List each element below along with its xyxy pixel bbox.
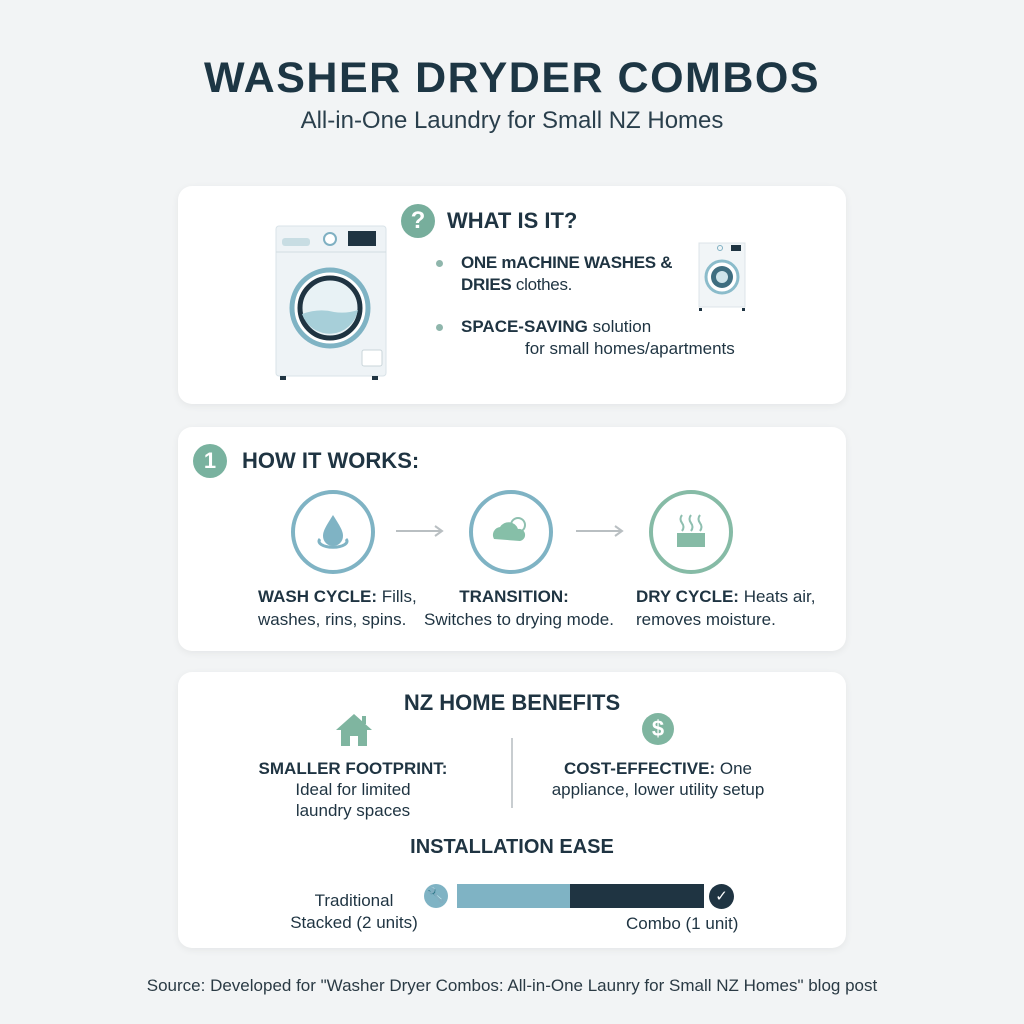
icon: wrench [424,884,448,908]
icon: step number: 1 [204,448,216,473]
bullet 2: for small homes/apartments [525,339,735,358]
title: WASHER DRYDER COMBOS [204,54,820,102]
text: wash cycle: washes, rins, spins. [258,610,406,629]
bullet 2 [436,317,735,358]
icon: dollar [642,713,674,745]
bullet 1: DRIES clothes. [461,275,572,294]
arrow [396,525,444,537]
label: traditional: Traditional [315,891,393,910]
icon: wrench: 🔧 [427,887,445,904]
heading: installation ease: INSTALLATION EASE [410,836,614,858]
benefit: smaller footprint: SMALLER FOOTPRINT: [259,759,447,778]
bullet 1: ONE mACHINE WASHES & [461,253,672,272]
panel: NZ home benefits [178,672,846,948]
panel: what is it [178,186,846,404]
icon: dry [649,490,733,574]
icon: transition [469,490,553,574]
text: wash cycle: WASH CYCLE: Fills, [258,587,417,606]
text: dry cycle [636,587,816,629]
heading: benefits: NZ HOME BENEFITS [404,690,620,715]
divider [511,738,513,808]
benefit: cost-effective [552,759,764,799]
text: transition [424,587,614,629]
benefit: smaller footprint: Ideal for limited [295,780,411,799]
icon: step number [193,444,227,478]
icon: small washer [698,242,746,311]
benefit: cost-effective: COST-EFFECTIVE: One [564,759,752,778]
icon: question badge: ? [411,207,425,234]
bar chart: installation ease [457,884,704,908]
label: traditional [290,891,418,932]
label: combo: Combo (1 unit) [626,914,738,933]
bullet 2: SPACE-SAVING solution [461,317,651,336]
bullet 1 [436,253,672,294]
icon: check [709,884,734,909]
text: dry cycle: DRY CYCLE: Heats air, [636,587,816,606]
heading: how it works: HOW IT WORKS: [242,448,419,473]
benefit: smaller footprint [259,759,447,820]
text: wash cycle [258,587,417,629]
icon: wash [291,490,375,574]
icon: dollar: $ [652,716,664,741]
heading: what is it: WHAT IS IT? [447,208,577,233]
text: dry cycle: removes moisture. [636,610,776,629]
label: traditional: Stacked (2 units) [290,913,418,932]
icon: washing machine [276,226,386,380]
benefit: smaller footprint: laundry spaces [296,801,410,820]
subtitle: All-in-One Laundry for Small NZ Homes [301,107,723,134]
panel: how it works [178,427,846,651]
icon: question badge [401,204,435,238]
benefit: cost-effective: appliance, lower utility setup [552,780,764,799]
arrow [576,525,624,537]
icon: check: ✓ [715,888,728,905]
text: transition: TRANSITION: [459,587,569,606]
icon: house [336,714,372,746]
text: transition: Switches to drying mode. [424,610,614,629]
source footnote: Source: Developed for "Washer Dryer Combos: All-in-One Launry for Small NZ Homes" blog post [147,976,877,995]
